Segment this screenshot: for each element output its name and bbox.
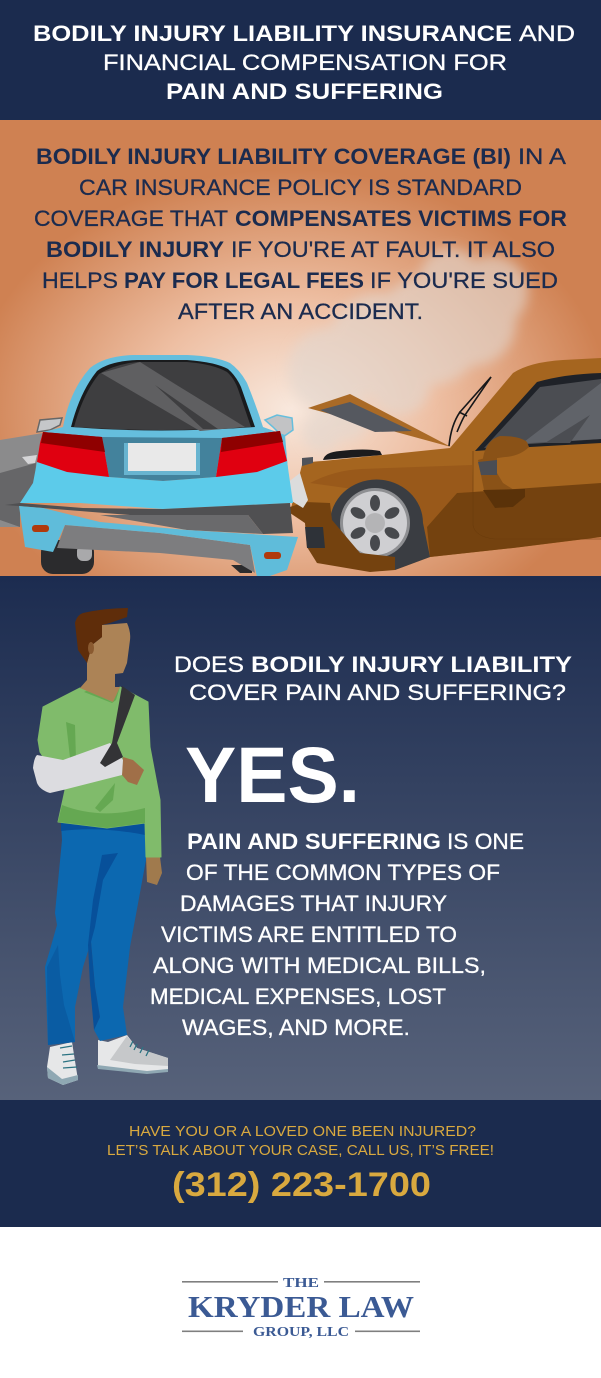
text block: damages: DAMAGES THAT INJURY bbox=[180, 891, 447, 916]
text block: damages: IS ONE bbox=[447, 829, 524, 854]
open door bbox=[0, 433, 43, 527]
text block: damages bbox=[150, 829, 524, 1040]
neck and face bbox=[80, 623, 130, 702]
call to action text: LET’S TALK ABOUT YOUR CASE, CALL US, IT’S FREE! bbox=[107, 1143, 494, 1159]
sling bbox=[33, 743, 123, 793]
text block: coverage definition: BODILY INJURY bbox=[46, 237, 224, 262]
text block: coverage definition: CAR INSURANCE POLICY IS STANDARD bbox=[79, 175, 522, 200]
text block: damages: PAIN AND SUFFERING bbox=[187, 829, 441, 854]
shirt bbox=[38, 687, 161, 857]
illustration: brown car bbox=[287, 358, 601, 572]
shoes bbox=[47, 1035, 168, 1085]
ear bbox=[88, 642, 94, 654]
text block: coverage definition: IN A bbox=[518, 144, 566, 169]
text block: coverage definition: AFTER AN ACCIDENT. bbox=[178, 299, 423, 324]
text block: coverage definition: HELPS bbox=[42, 268, 118, 293]
hand bbox=[146, 857, 162, 885]
text block: coverage definition: IF YOU'RE AT FAULT. IT ALSO bbox=[231, 237, 555, 262]
phone number: (312) 223-1700 bbox=[172, 1166, 431, 1204]
text block: coverage definition: COVERAGE THAT bbox=[34, 206, 228, 231]
logo: Kryder Law Group: GROUP, LLC bbox=[253, 1325, 349, 1340]
call to action text: HAVE YOU OR A LOVED ONE BEEN INJURED? bbox=[129, 1124, 476, 1140]
answer: yes: YES. bbox=[185, 730, 360, 819]
heading bbox=[33, 21, 575, 104]
text block: damages: WAGES, AND MORE. bbox=[182, 1015, 410, 1040]
bumper bbox=[5, 503, 293, 534]
question: BODILY INJURY LIABILITY bbox=[251, 652, 572, 677]
question: COVER PAIN AND SUFFERING? bbox=[189, 680, 566, 705]
text block: damages: MEDICAL EXPENSES, LOST bbox=[150, 984, 446, 1009]
logo: Kryder Law Group bbox=[182, 1276, 420, 1340]
hand in sling bbox=[122, 757, 144, 785]
panel: call to action bbox=[0, 1100, 601, 1227]
illustration: injured man bbox=[33, 608, 168, 1085]
heading: BODILY INJURY LIABILITY INSURANCE bbox=[33, 21, 512, 46]
tail body bbox=[20, 461, 293, 509]
panel: pain and suffering answer bbox=[0, 576, 601, 1100]
left wheel bbox=[41, 540, 94, 574]
text block: damages: OF THE COMMON TYPES OF bbox=[186, 860, 500, 885]
hair bbox=[75, 608, 128, 663]
panel: crash scene bbox=[0, 120, 601, 577]
pants bbox=[45, 823, 146, 1045]
panel: footer logo bbox=[0, 1227, 601, 1378]
wiper bbox=[449, 377, 491, 446]
roof bbox=[38, 355, 288, 470]
logo: Kryder Law Group: KRYDER LAW bbox=[188, 1289, 414, 1324]
logo: Kryder Law Group: THE bbox=[283, 1276, 319, 1291]
smoke bbox=[288, 248, 528, 452]
text block: coverage definition: BODILY INJURY LIABILITY COVERAGE (BI) bbox=[36, 144, 511, 169]
illustration: blue car bbox=[0, 355, 298, 577]
question bbox=[174, 652, 572, 705]
text block: coverage definition: IF YOU'RE SUED bbox=[370, 268, 558, 293]
panel: header bbox=[0, 0, 601, 120]
question: DOES bbox=[174, 652, 244, 677]
call to action text bbox=[107, 1124, 494, 1159]
heading: AND bbox=[519, 21, 575, 46]
text block: coverage definition: PAY FOR LEGAL FEES bbox=[124, 268, 364, 293]
strap bbox=[100, 686, 135, 767]
text block: coverage definition: COMPENSATES VICTIMS FOR bbox=[235, 206, 567, 231]
heading: FINANCIAL COMPENSATION FOR bbox=[103, 50, 507, 75]
text block: coverage definition bbox=[34, 144, 567, 324]
text block: damages: ALONG WITH MEDICAL BILLS, bbox=[153, 953, 486, 978]
wheel spokes bbox=[349, 495, 401, 551]
text block: damages: VICTIMS ARE ENTITLED TO bbox=[161, 922, 457, 947]
heading: PAIN AND SUFFERING bbox=[166, 79, 443, 104]
